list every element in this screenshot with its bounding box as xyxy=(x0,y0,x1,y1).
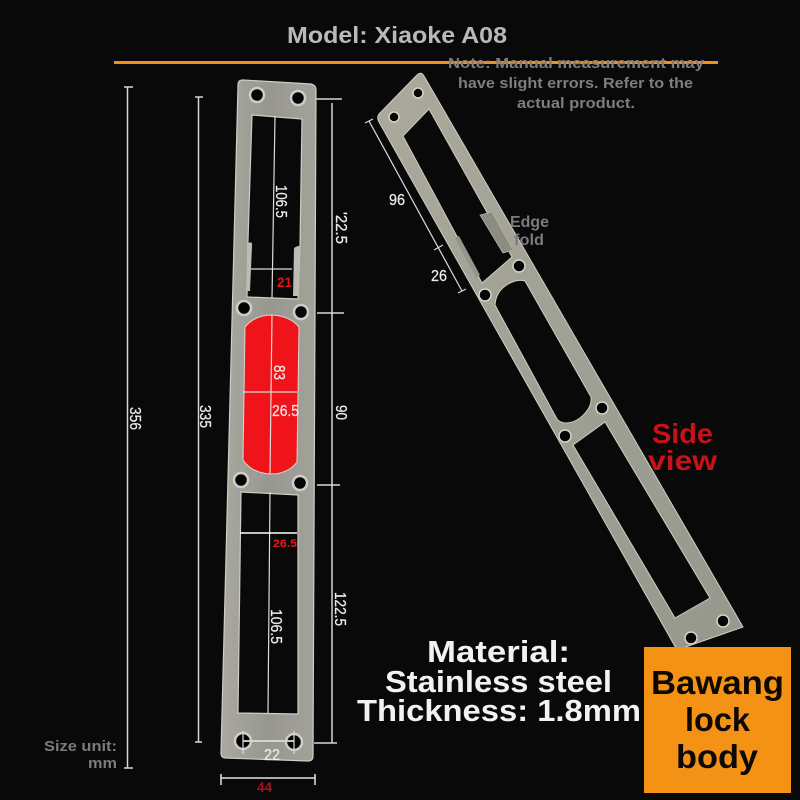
material text xyxy=(357,634,641,728)
material text: Material: xyxy=(427,634,570,669)
label 26.5 lower: 26.5 xyxy=(273,538,297,550)
label 22: 22 xyxy=(264,747,280,764)
left fold strip xyxy=(246,242,252,291)
side view label: Side xyxy=(652,418,713,449)
badge text: Bawang xyxy=(651,664,784,701)
side plate holes xyxy=(389,88,729,644)
inner dimension lines xyxy=(240,116,297,754)
orange badge xyxy=(644,647,791,793)
material text: Stainless steel xyxy=(385,664,612,699)
label 26.5 in slot: 26.5 xyxy=(272,403,299,420)
note text xyxy=(448,56,704,112)
red slot xyxy=(243,315,299,474)
width dimension 44: 44 xyxy=(257,779,272,795)
orange header rule xyxy=(114,61,718,64)
note text: have slight errors. Refer to the xyxy=(458,76,693,92)
label 96: 96 xyxy=(389,192,405,209)
title: Model: Xiaoke A08 xyxy=(287,22,507,48)
side view label xyxy=(648,418,717,476)
dimension 335: 335 xyxy=(196,405,213,428)
label 90: 90 xyxy=(332,405,349,420)
edge fold label: fold xyxy=(514,232,544,249)
badge text xyxy=(651,664,784,775)
badge text: lock xyxy=(685,701,751,738)
label 122.5 lower: 122.5 xyxy=(331,592,348,626)
side view plate xyxy=(378,73,743,650)
size unit note xyxy=(44,739,117,772)
label 106.5 lower: 106.5 xyxy=(267,609,284,644)
dimension 356: 356 xyxy=(126,407,143,430)
edge fold label: Edge xyxy=(510,214,549,231)
note text: Note: Manual measurement may xyxy=(448,56,704,72)
width dimension 44 xyxy=(221,774,315,795)
size unit note: Size unit: xyxy=(44,739,117,755)
dimension 335 xyxy=(195,97,213,742)
front view plate xyxy=(221,80,316,761)
right segment dimensions xyxy=(314,99,349,743)
side plate body with windows xyxy=(378,73,743,650)
right fold strip xyxy=(293,246,300,296)
label 83: 83 xyxy=(270,365,287,380)
front view inner dimensions xyxy=(240,116,299,764)
upper fold xyxy=(480,212,513,253)
badge text: body xyxy=(676,738,759,775)
label 122.5 top: '22.5 xyxy=(332,212,349,244)
material text: Thickness: 1.8mm xyxy=(357,693,641,728)
side view label: view xyxy=(648,445,717,476)
side view dimensions xyxy=(365,119,466,293)
note text: actual product. xyxy=(517,96,635,112)
edge fold label xyxy=(510,214,549,249)
label 26: 26 xyxy=(431,268,447,285)
label 21: 21 xyxy=(277,274,292,290)
plate body with windows xyxy=(221,80,316,761)
mounting holes xyxy=(234,88,308,750)
label 106.5 top: 106.5 xyxy=(272,185,289,218)
lower fold xyxy=(455,236,480,278)
size unit note: mm xyxy=(88,756,117,772)
dimension 356 xyxy=(124,87,143,768)
